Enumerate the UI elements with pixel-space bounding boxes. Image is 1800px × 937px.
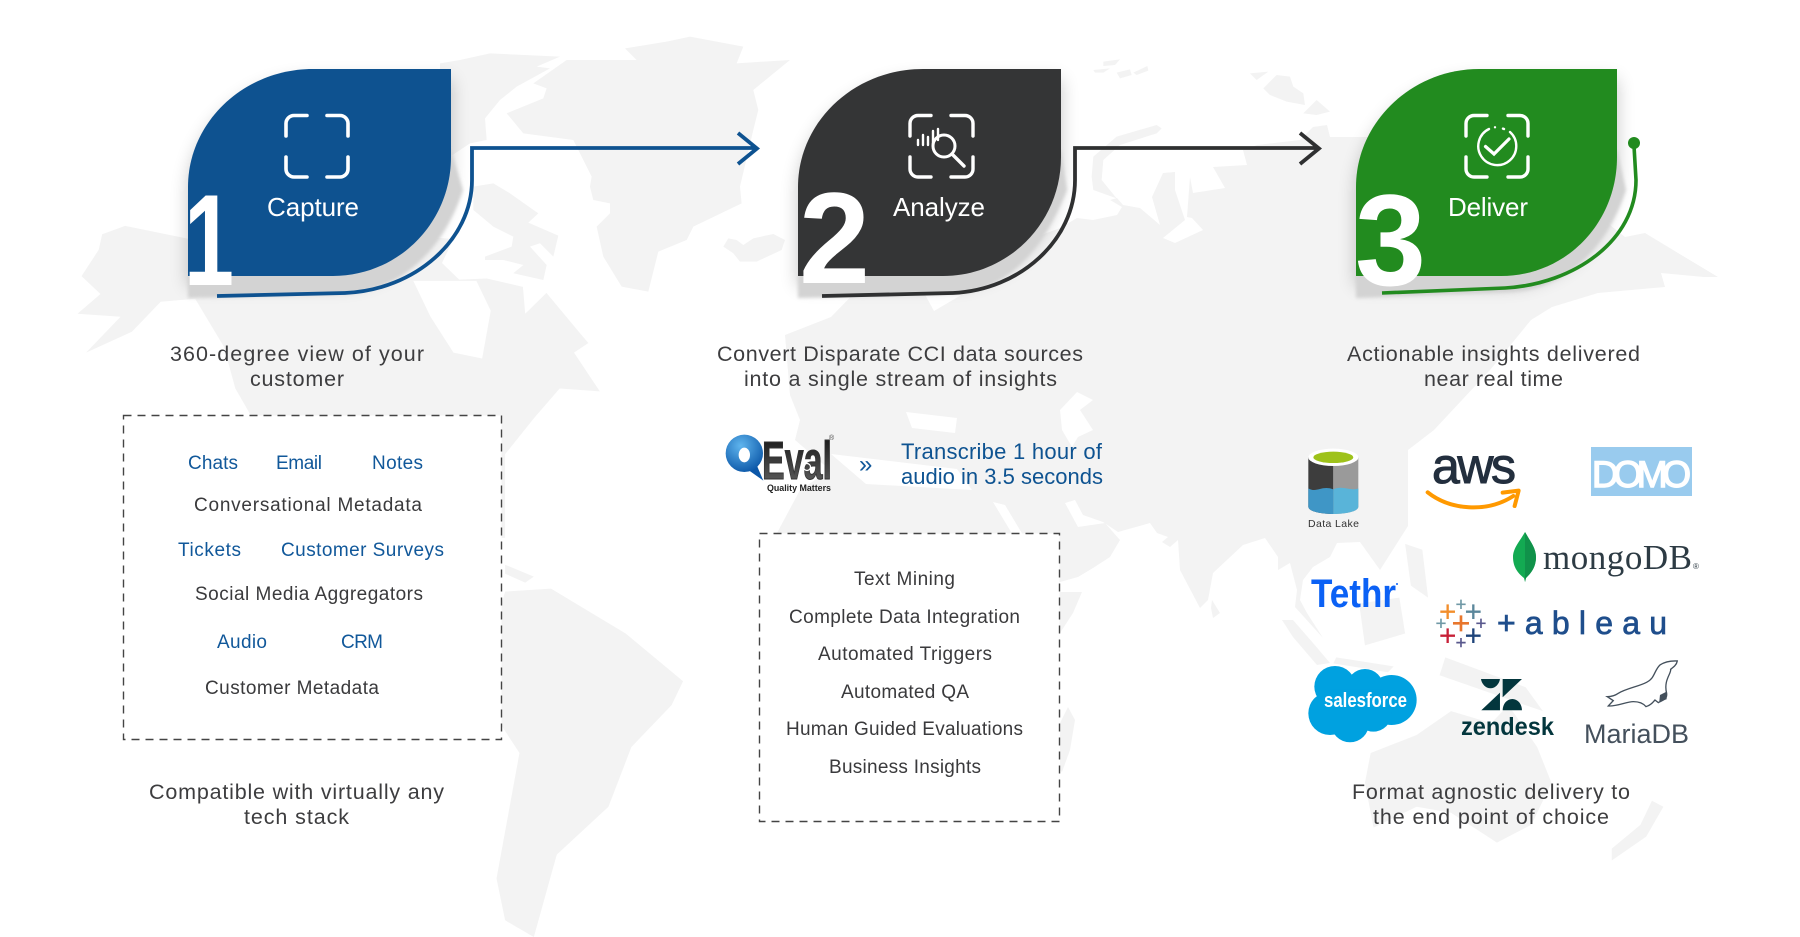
logo: Tableau: +ableau — [1497, 605, 1667, 641]
number 2: 2 — [799, 165, 870, 311]
panel: analysis capabilities box: Automated QA — [841, 682, 969, 703]
heading: Deliver: Deliver — [1448, 192, 1528, 222]
text: compatibility note: tech stack — [244, 805, 349, 829]
logo: Zendesk: zendesk — [1461, 713, 1554, 741]
panel: step 1 capture — [184, 69, 757, 313]
leaf shadow 2 — [798, 79, 1067, 298]
logo: Salesforce — [1308, 666, 1417, 742]
panel: data sources box: Social Media Aggregators — [195, 584, 423, 605]
callout: transcription speed — [901, 439, 1103, 489]
logo: Data Lake: Data Lake — [1308, 518, 1359, 530]
end line with dot — [1382, 137, 1640, 293]
connector arrow to step 2 — [217, 133, 757, 296]
number 1: 1 — [184, 167, 234, 313]
logo: MongoDB: mongoDB — [1543, 538, 1692, 577]
chevrons: » — [859, 451, 872, 478]
panel: data sources box: Notes — [372, 453, 423, 474]
logo: MongoDB — [1513, 532, 1699, 582]
logo: Tethr: Tethr — [1311, 572, 1396, 616]
leaf shadow 1 — [188, 79, 463, 298]
logo: Domo: DOMO — [1592, 454, 1691, 495]
logo: QEval: ® — [829, 434, 835, 442]
icon: deliver frame and check — [1466, 116, 1528, 177]
panel: data sources box: Conversational Metadata — [194, 495, 422, 516]
panel: analysis capabilities box: Business Insights — [829, 757, 981, 778]
logo: Salesforce: salesforce — [1324, 690, 1407, 712]
leaf shape 3 — [1356, 69, 1617, 276]
panel: data sources box — [124, 416, 502, 740]
panel: step 2 analyze — [798, 69, 1319, 311]
logo: Zendesk — [1461, 679, 1554, 741]
panel: analysis capabilities box: Automated Triggers — [818, 644, 992, 665]
icon: capture frame — [286, 116, 348, 177]
leaf shape 2 — [798, 69, 1061, 276]
leaf shape 1 — [188, 69, 451, 276]
text: capture description: customer — [250, 367, 344, 391]
panel: data sources box: Tickets — [178, 540, 241, 561]
leaf shadow 3 — [1356, 79, 1626, 298]
logo: QEval: Quality Matters — [767, 483, 831, 493]
text: delivery note: Format agnostic delivery to — [1352, 780, 1630, 804]
heading: Capture: Capture — [267, 192, 359, 222]
logo: AWS: aws — [1432, 438, 1516, 494]
logo: Tableau — [1436, 600, 1667, 647]
text: deliver description: Actionable insights delivered — [1347, 342, 1640, 366]
text: delivery note: the end point of choice — [1373, 805, 1609, 829]
logo: QEval — [726, 431, 835, 493]
panel: analysis capabilities box: Text Mining — [854, 569, 955, 590]
text: compatibility note — [149, 780, 444, 829]
panel: data sources box: Customer Metadata — [205, 678, 379, 699]
panel: data sources box: Customer Surveys — [281, 540, 444, 561]
panel: analysis capabilities box — [760, 534, 1060, 822]
text: capture description — [170, 342, 424, 391]
callout: transcription speed: Transcribe 1 hour of — [901, 439, 1103, 464]
text: analyze description: into a single stream of insights — [744, 367, 1057, 391]
panel: data sources box: Chats — [188, 453, 238, 474]
text: deliver description: near real time — [1424, 367, 1563, 391]
text: analyze description: Convert Disparate CCI data sources — [717, 342, 1083, 366]
icon: analyze frame and magnifier — [910, 116, 973, 177]
logo: MariaDB: MariaDB — [1584, 719, 1689, 749]
text: capture description: 360-degree view of your — [170, 342, 424, 366]
panel: data sources box: Audio — [217, 632, 267, 653]
text: delivery note — [1352, 780, 1630, 829]
number 3: 3 — [1355, 167, 1426, 313]
logo: QEval: Eval — [762, 431, 832, 491]
text: compatibility note: Compatible with virtually any — [149, 780, 444, 804]
logo: MongoDB: ® — [1693, 562, 1699, 571]
callout: transcription speed: audio in 3.5 seconds — [901, 464, 1103, 489]
panel: analysis capabilities box: Complete Data Integration — [789, 607, 1020, 628]
panel: data sources box: Email — [276, 453, 322, 474]
logo: Data Lake — [1308, 449, 1359, 530]
panel: step 3 deliver — [1355, 69, 1640, 313]
logo: MariaDB — [1584, 661, 1689, 749]
panel: analysis capabilities box: Human Guided Evaluations — [786, 719, 1023, 740]
connector arrow to step 3 — [822, 133, 1319, 296]
panel: data sources box: CRM — [341, 632, 383, 653]
heading: Analyze: Analyze — [893, 192, 985, 222]
text: deliver description — [1347, 342, 1640, 391]
text: analyze description — [717, 342, 1083, 391]
